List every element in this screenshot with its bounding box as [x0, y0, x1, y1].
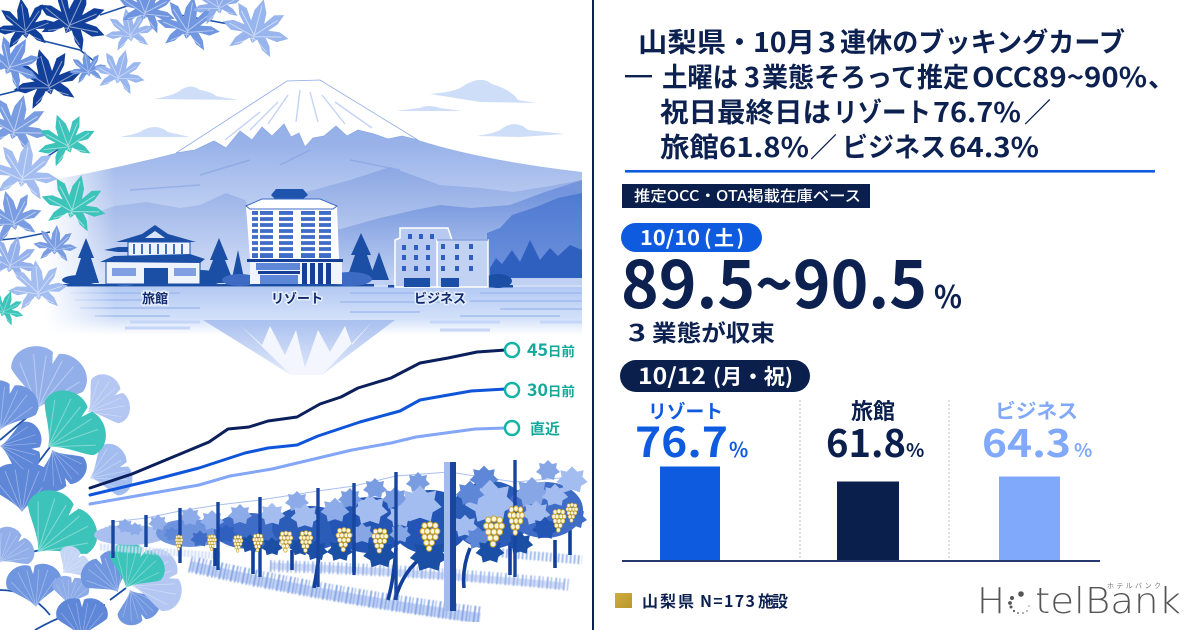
marker: 直近	[505, 418, 560, 439]
illustration: Fuji reflection	[125, 320, 582, 375]
big number: saturday OCC: %	[934, 272, 962, 317]
pill: 10/10: 10/10	[640, 222, 700, 251]
line: 30日前	[90, 389, 506, 495]
logo: HotelBank	[977, 581, 1181, 622]
vineyard wires	[113, 472, 582, 522]
logo: HotelBank: telBank	[1035, 581, 1181, 622]
line: 45日前	[90, 350, 506, 488]
panel: illustration	[0, 0, 588, 630]
legend: sample: 施設	[758, 588, 788, 612]
label: ビジネス: ビジネス	[414, 288, 466, 307]
title: ／	[1024, 91, 1051, 130]
marker: 30日前: 30日前	[527, 376, 575, 401]
title: 、	[1148, 56, 1175, 95]
pill: 10/12	[620, 359, 810, 392]
legend: sample	[615, 588, 788, 612]
title: ・	[726, 21, 753, 60]
tag: basis: 推定OCC・OTA掲載在庫ベース	[634, 185, 861, 206]
label: リゾート: リゾート	[271, 288, 323, 307]
divider	[592, 0, 594, 630]
illustration: lake	[45, 287, 582, 335]
title: 3	[744, 56, 760, 95]
illustration: resort hotel	[246, 189, 343, 284]
logo: HotelBank: ホテルバンク	[1107, 581, 1161, 591]
legend: sample: N=173	[700, 588, 755, 612]
title: リゾート	[833, 91, 931, 130]
vine foliage mass	[94, 481, 583, 554]
pill: 10/10: (土)	[704, 222, 744, 251]
title: 76.7%	[933, 91, 1021, 130]
illustration: maple leaves	[0, 0, 297, 328]
caption: 3業態が収束: 3	[628, 314, 646, 348]
marker: 45日前	[505, 336, 575, 361]
column: リゾート: リゾート	[648, 397, 723, 424]
title: 64.3%	[949, 126, 1039, 165]
column: リゾート	[635, 397, 748, 560]
pill: 10/10	[621, 222, 762, 252]
column: 旅館: 61.8	[826, 413, 906, 468]
illustration: ryokan building	[100, 225, 205, 284]
title rule	[625, 170, 1155, 173]
illustration: mountains and lake background	[40, 80, 582, 335]
illustration: ginkgo leaves	[0, 339, 186, 630]
title: ビジネス	[842, 126, 946, 165]
vine leaves	[103, 460, 588, 571]
column: ビジネス: 64.3	[982, 413, 1071, 468]
column: 旅館	[826, 394, 924, 560]
title: 10月	[753, 21, 815, 60]
title: 山梨県	[638, 21, 726, 60]
big number: saturday OCC: 89.5~90.5	[621, 233, 927, 327]
grape clusters	[175, 503, 578, 553]
illustration: business hotel	[395, 228, 488, 287]
column: ビジネス	[982, 395, 1092, 560]
caption: 3業態が収束: 業態が収束	[652, 314, 775, 348]
label: 旅館: 旅館	[142, 288, 168, 307]
illustration: clouds	[120, 80, 565, 137]
vineyard posts	[113, 460, 515, 600]
bar chart: 10/12 by type	[622, 394, 1100, 562]
column: 旅館: %	[906, 436, 924, 463]
illustration: vineyard	[94, 460, 588, 618]
illustration: Mt. Fuji	[40, 80, 582, 300]
column: ビジネス: %	[1074, 436, 1092, 463]
vine trunks	[215, 530, 570, 600]
column: リゾート: 76.7	[635, 409, 728, 469]
column: 旅館: 旅館	[851, 394, 895, 426]
title: 旅館61.8%	[660, 126, 809, 165]
column: リゾート: %	[729, 434, 748, 463]
marker: 45日前: 45日前	[527, 336, 575, 361]
title: 土曜は	[662, 56, 738, 95]
title: 連休のブッキングカーブ	[840, 21, 1125, 60]
vineyard grass	[100, 547, 582, 618]
title: 祝日最終日は	[660, 91, 831, 130]
marker: 直近: 直近	[530, 418, 560, 439]
pill: 10/12: (月・祝)	[713, 361, 793, 391]
line: 直近	[90, 428, 506, 504]
illustration: shoreline and trees	[62, 233, 513, 288]
chart: booking curve lines	[90, 350, 506, 504]
title	[625, 21, 1175, 165]
title: ／	[810, 126, 837, 165]
logo: HotelBank: H	[977, 581, 1005, 622]
illustration: layered mountains	[88, 167, 582, 290]
title: 業態そろって推定	[762, 56, 969, 95]
marker: 30日前	[505, 376, 575, 401]
title: 3	[818, 21, 836, 60]
legend: sample: 山梨県	[642, 588, 694, 612]
pill: 10/12: 10/12	[638, 359, 706, 391]
column: ビジネス: ビジネス	[995, 395, 1078, 424]
title: OCC89~90%	[972, 56, 1147, 95]
